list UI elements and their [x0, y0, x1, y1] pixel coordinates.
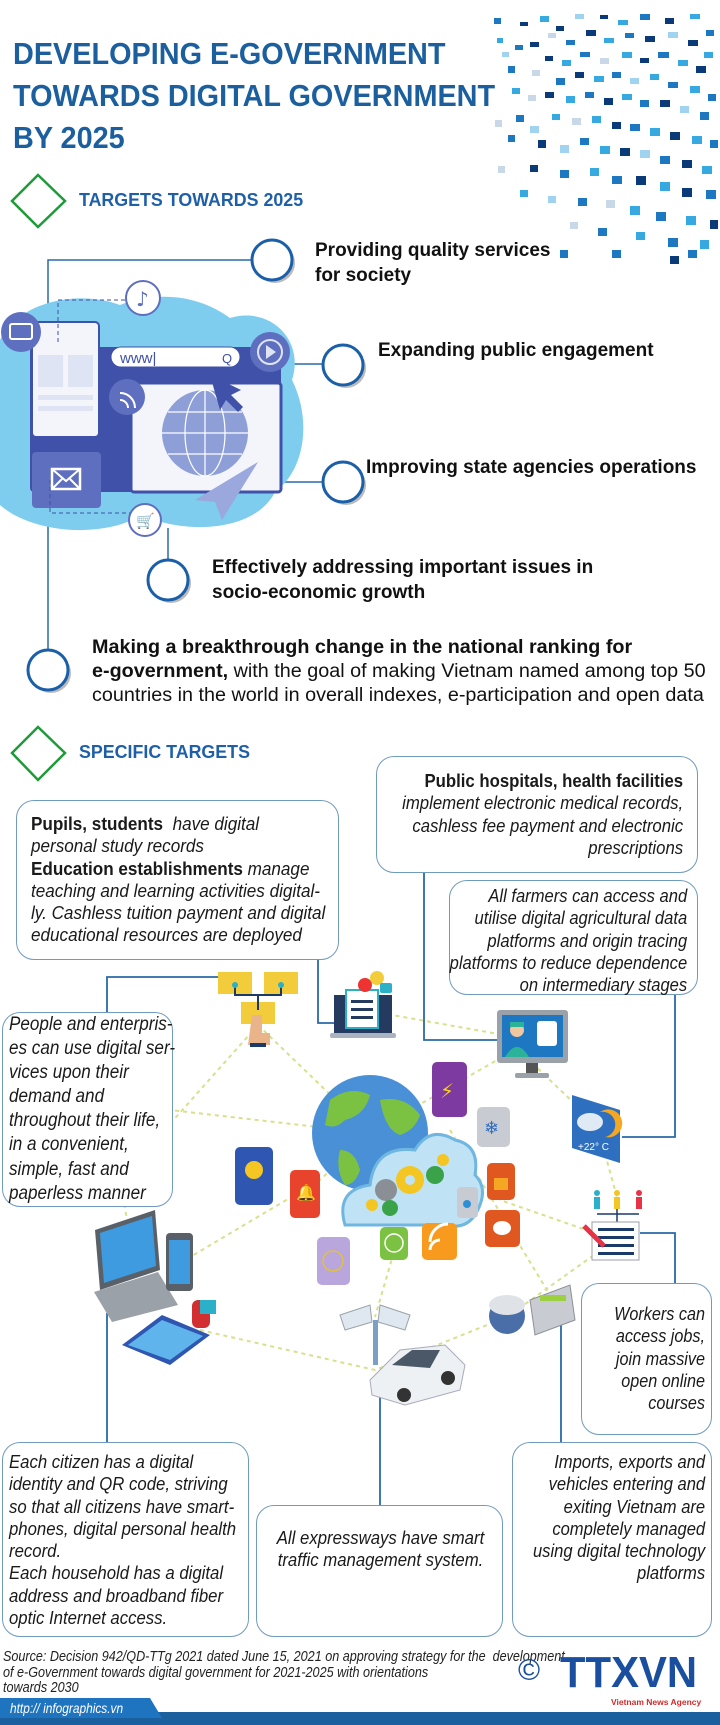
illustration: web browser: 🛒 [136, 512, 155, 530]
panel: citizens [2, 1442, 249, 1637]
target 3 text: Improving state agencies operations [366, 457, 696, 478]
target circles [28, 240, 366, 693]
panel: imports: using digital technology [533, 1541, 705, 1561]
footer bar [0, 1698, 720, 1725]
icon: globe [312, 1075, 428, 1191]
target 1 text [315, 240, 550, 286]
panel: workers: open online [621, 1371, 705, 1391]
dotted network lines [40, 1010, 617, 1370]
logo: TTXVN [518, 1648, 702, 1707]
target 5 text: e-government, with the goal of making Vietnam named among top 50 [92, 661, 706, 682]
icons: app tiles [235, 1062, 520, 1285]
panel: people and enterprises: simple, fast and [9, 1159, 129, 1180]
target 2 text: Expanding public engagement [378, 340, 654, 361]
panel: farmers: platforms to reduce dependence [449, 953, 687, 973]
panel: expressways [256, 1505, 503, 1637]
panel: people and enterprises: People and enterpris- [9, 1014, 173, 1035]
title: BY 2025 [13, 120, 125, 155]
decoration: pixel squares [494, 14, 718, 264]
heading: targets towards 2025: TARGETS TOWARDS 2025 [79, 190, 303, 210]
panel: farmers [449, 880, 698, 995]
panel: hospitals: cashless fee payment and electronic [412, 816, 683, 836]
panel: citizens: phones, digital personal health [9, 1519, 236, 1539]
panel: workers: join massive [616, 1349, 705, 1369]
source text [3, 1648, 566, 1696]
panel: imports: completely managed [552, 1519, 705, 1539]
source text: towards 2030 [3, 1679, 79, 1696]
panel: citizens: so that all citizens have smart- [9, 1497, 234, 1517]
panel: people and enterprises: paperless manner [9, 1183, 146, 1204]
footer bar: http:// infographics.vn [10, 1700, 123, 1716]
source text: Source: Decision 942/QD-TTg 2021 dated June 15, 2021 on approving strategy for the development [3, 1648, 565, 1665]
panel: citizens: optic Internet access. [9, 1608, 167, 1628]
title: DEVELOPING E-GOVERNMENT [13, 36, 445, 71]
icons: app tiles: ⚡ [440, 1079, 454, 1103]
illustration: web browser: Q [222, 351, 232, 366]
panel: citizens: address and broadband fiber [9, 1586, 223, 1606]
icon: weather: +22° C [578, 1142, 609, 1153]
panel: people and enterprises: demand and [9, 1086, 104, 1107]
icon: cameras and car [340, 1305, 465, 1405]
panel: workers [581, 1283, 712, 1435]
panel: education: teaching and learning activities digital- [31, 881, 320, 901]
panel: hospitals [376, 756, 698, 873]
icon: laptop phone watch tablet [94, 1210, 216, 1365]
panel: hospitals: implement electronic medical records, [402, 793, 683, 813]
target 5 text [92, 637, 706, 706]
panel: imports: vehicles entering and [548, 1474, 705, 1494]
panel: people and enterprises [2, 1012, 173, 1207]
panel: imports [512, 1442, 712, 1637]
panel: citizens: identity and QR code, striving [9, 1474, 228, 1494]
icon: cloud with gears [343, 1134, 482, 1226]
panel: people and enterprises: vices upon their [9, 1062, 129, 1083]
logo: TTXVN: © [518, 1654, 540, 1687]
panel: hospitals: prescriptions [588, 838, 683, 858]
panel: education: Pupils, students have digital [31, 814, 259, 834]
heading: specific targets: SPECIFIC TARGETS [79, 742, 250, 762]
icon: doctor monitor [497, 1010, 568, 1078]
panel: imports: platforms [637, 1563, 705, 1583]
icon: envelopes with hand [218, 972, 298, 1047]
target 4 text: Effectively addressing important issues in [212, 557, 593, 578]
panel: education: personal study records [31, 836, 204, 856]
connector lines specific [107, 873, 675, 1505]
panel: citizens: record. [9, 1541, 61, 1561]
target 4 text: socio-economic growth [212, 582, 425, 603]
title [13, 36, 495, 155]
panel: expressways: All expressways have smart [277, 1528, 484, 1548]
target 1 text: for society [315, 265, 411, 286]
target 4 text [212, 557, 593, 603]
panel: imports: Imports, exports and [554, 1452, 705, 1472]
panel: imports: exiting Vietnam are [564, 1497, 705, 1517]
panel: farmers: utilise digital agricultural data [474, 908, 687, 928]
target 5 text: Making a breakthrough change in the national ranking for [92, 637, 632, 658]
panel: education: educational resources are deployed [31, 925, 302, 945]
icon: laptop document [330, 971, 396, 1038]
panel: workers: courses [648, 1393, 705, 1413]
icon: weather [572, 1095, 622, 1163]
panel: education: Education establishments manage [31, 859, 309, 879]
panel: farmers: All farmers can access and [488, 886, 687, 906]
panel: people and enterprises: throughout their life, [9, 1110, 160, 1131]
panel: farmers: on intermediary stages [519, 975, 687, 995]
icon: people and document [584, 1190, 642, 1260]
panel: education [16, 800, 339, 960]
illustration: web browser: ♪ [136, 287, 149, 311]
panel: farmers: platforms and origin tracing [487, 931, 687, 951]
connector lines targets [48, 260, 323, 650]
logo: TTXVN: TTXVN [560, 1648, 697, 1697]
logo: TTXVN: Vietnam News Agency [611, 1697, 701, 1707]
icons: app tiles: ❄ [484, 1118, 499, 1139]
panel: people and enterprises: in a convenient, [9, 1134, 129, 1155]
illustration: web browser [0, 281, 303, 536]
icon: targets diamond 1 [12, 175, 65, 227]
panel: people and enterprises: es can use digital ser- [9, 1038, 175, 1059]
panel: workers: access jobs, [616, 1326, 705, 1346]
title: TOWARDS DIGITAL GOVERNMENT [13, 78, 495, 113]
icons: app tiles: 🔔 [296, 1183, 316, 1202]
panel: education: ly. Cashless tuition payment and digital [31, 903, 325, 923]
panel: expressways: traffic management system. [278, 1550, 483, 1570]
illustration: web browser: www| [119, 350, 156, 367]
icon: specific diamond 2 [12, 727, 65, 780]
panel: citizens: Each citizen has a digital [9, 1452, 193, 1472]
source text: of e-Government towards digital government for 2021-2025 with orientations [3, 1664, 428, 1680]
target 5 text: countries in the world in overall indexes, e-participation and open data [92, 685, 704, 706]
panel: citizens: Each household has a digital [9, 1563, 223, 1583]
target 1 text: Providing quality services [315, 240, 550, 261]
icon: dome sensor and panel [489, 1285, 575, 1335]
panel: hospitals: Public hospitals, health facilities [424, 771, 683, 791]
panel: workers: Workers can [614, 1304, 705, 1324]
